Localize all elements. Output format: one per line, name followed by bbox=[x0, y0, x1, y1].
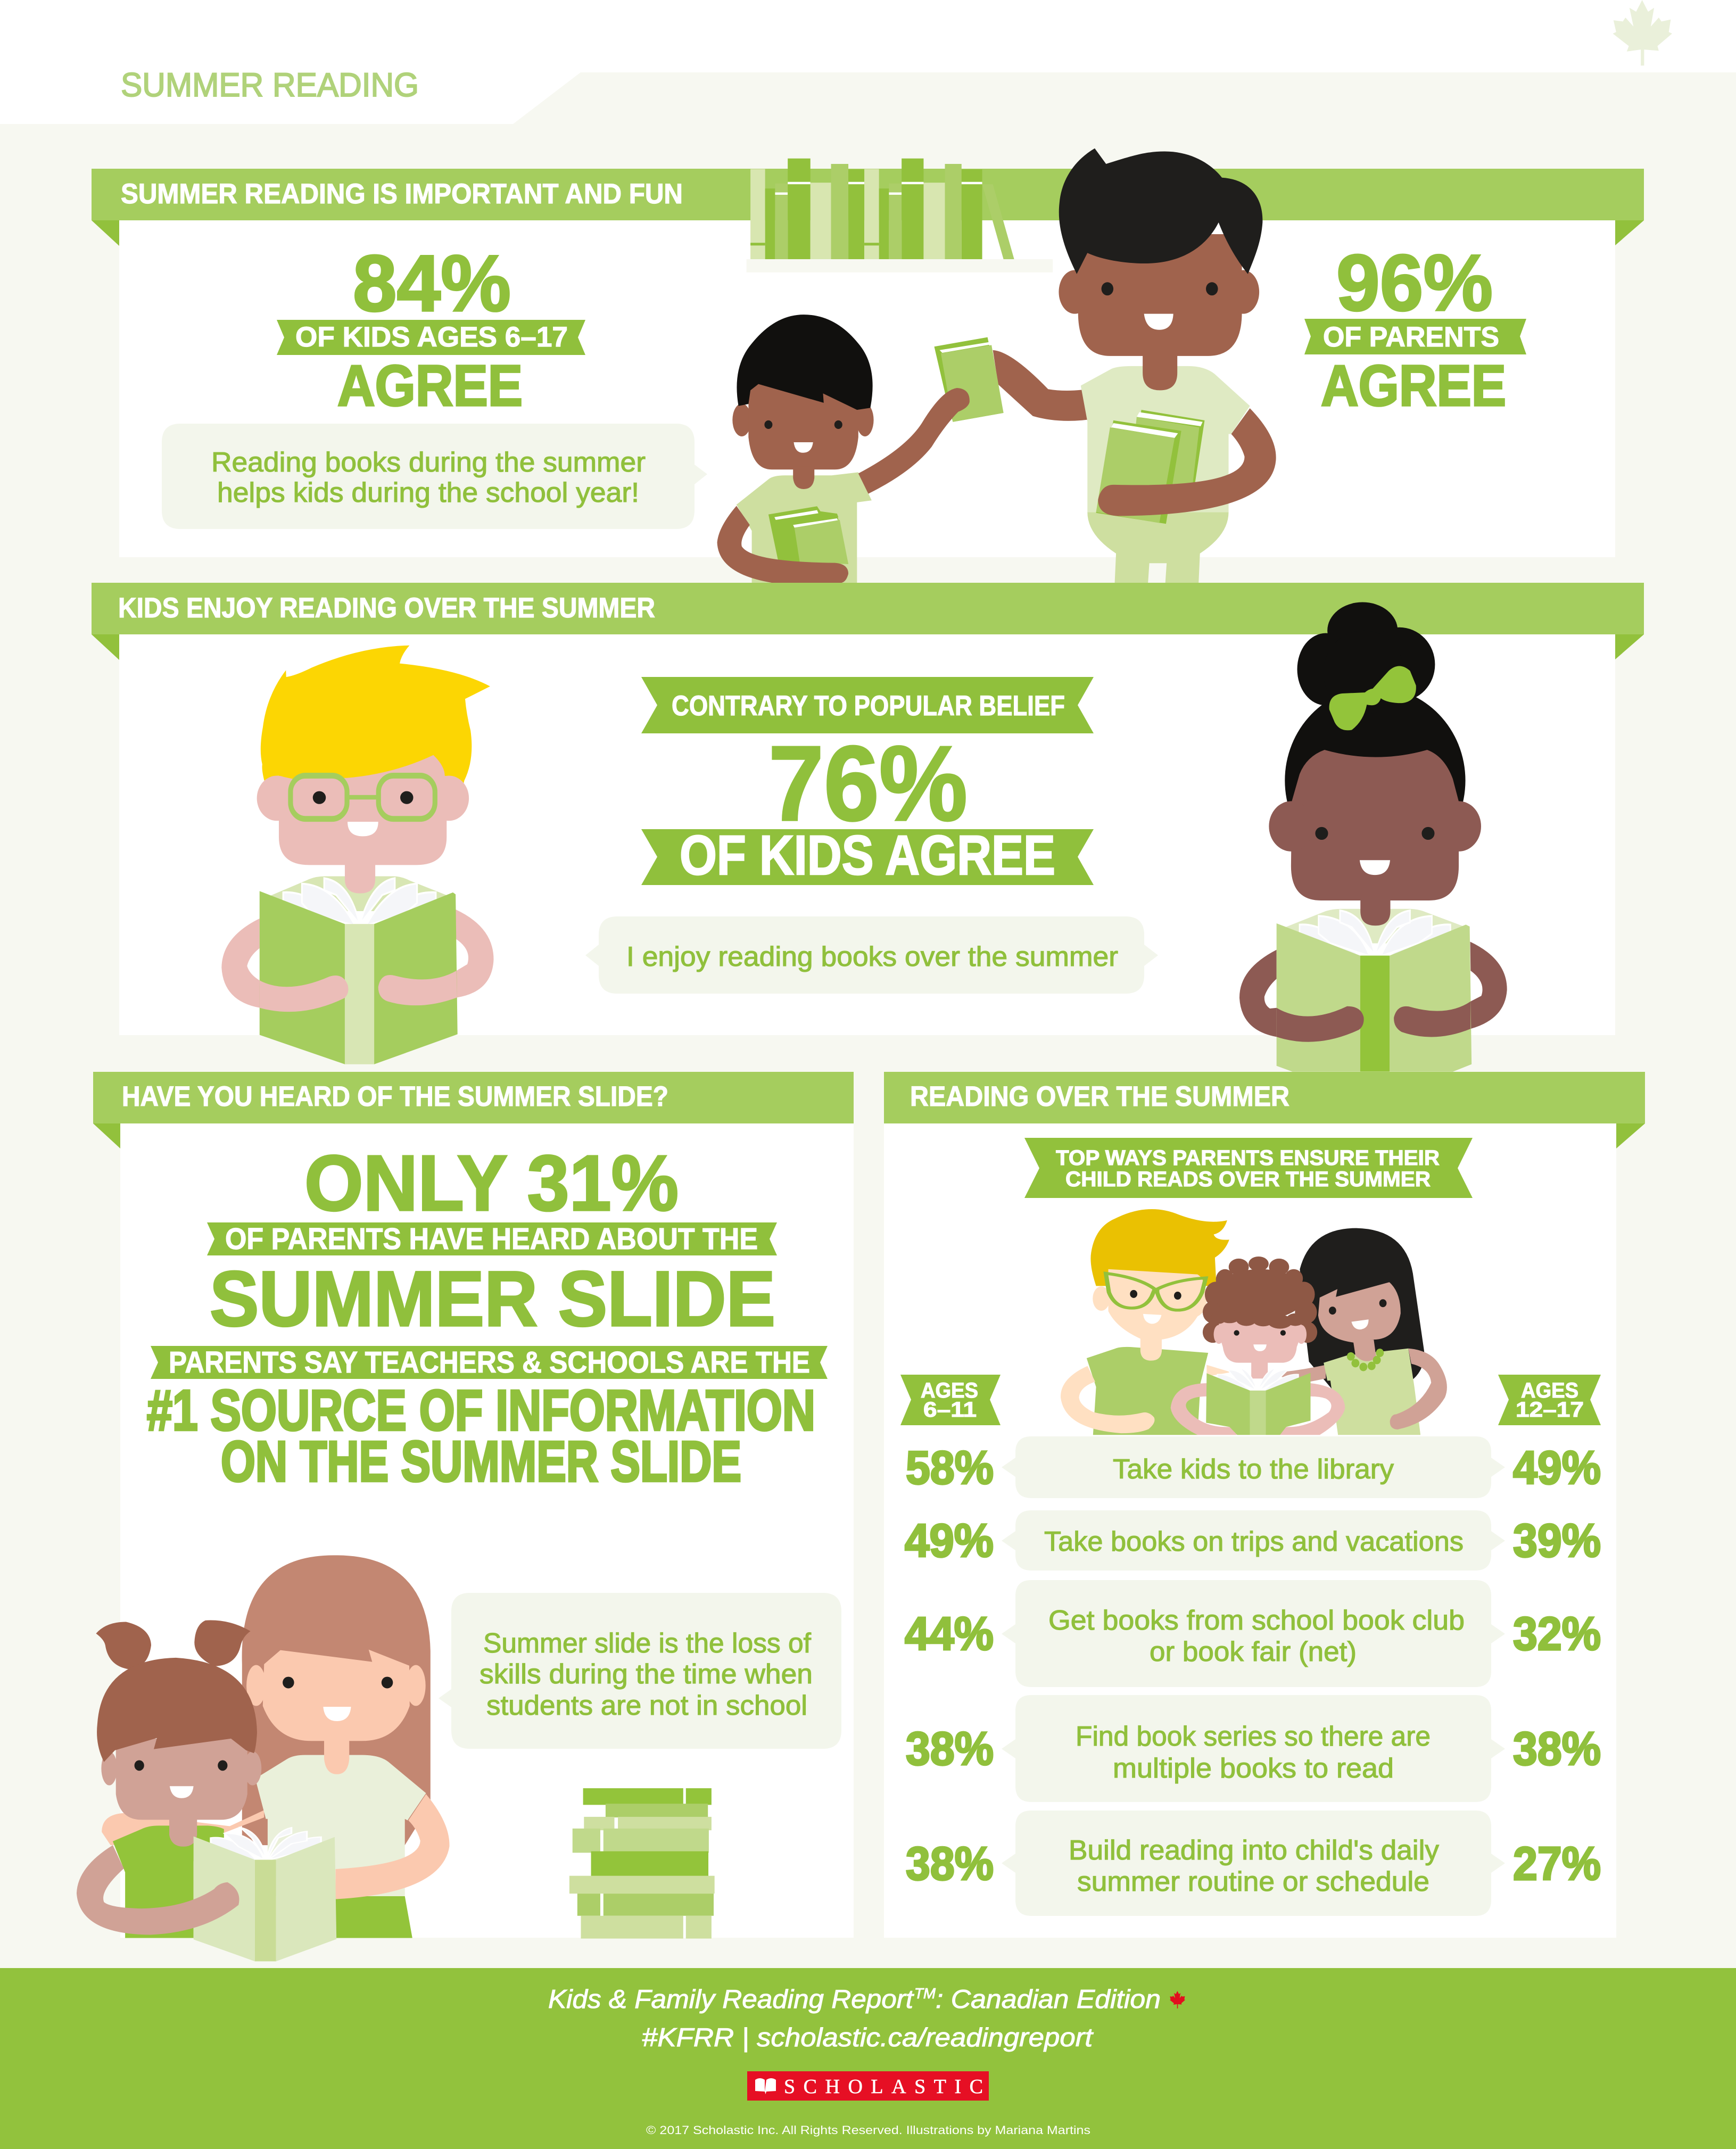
stat: 84 percent of kids: AGREE bbox=[337, 353, 523, 418]
illustration: mother and daughter reading bbox=[77, 1555, 450, 1961]
callout: reading books during the summer bbox=[162, 424, 707, 529]
row: book club bbox=[905, 1580, 1601, 1687]
callout: summer slide definition bbox=[439, 1593, 841, 1749]
footer: TM bbox=[914, 1985, 936, 2002]
stat: 84 percent of kids: 84% bbox=[353, 238, 511, 328]
icon: maple leaf bbox=[1613, 0, 1672, 65]
ribbon: ages 12-17 bbox=[1498, 1375, 1601, 1425]
panel: kids enjoy reading over the summer bbox=[92, 583, 1644, 1035]
stat: only 31 percent bbox=[147, 1139, 828, 1493]
icon: red maple leaf bbox=[1170, 1991, 1185, 2009]
logo: scholastic bbox=[747, 2071, 989, 2101]
ribbon: ages 6-11: AGES bbox=[921, 1379, 978, 1402]
row: daily routine: 38% bbox=[906, 1837, 994, 1890]
row: take books on trips: Take books on trips and vacations bbox=[1044, 1526, 1464, 1557]
stat: 96 percent of parents: 96% bbox=[1336, 238, 1493, 327]
stat: 76 percent of kids agree: OF KIDS AGREE bbox=[680, 824, 1055, 887]
stat: 84 percent of kids bbox=[277, 238, 585, 418]
footer: Kids & Family Reading Report bbox=[548, 1985, 914, 2014]
icon: bookshelf bbox=[747, 159, 1053, 272]
stat: 76 percent of kids agree bbox=[641, 677, 1094, 887]
panel: kids enjoy reading over the summer: KIDS ENJOY READING OVER THE SUMMER bbox=[118, 592, 655, 624]
callout: I enjoy reading books bbox=[585, 916, 1158, 994]
callout: I enjoy reading books: I enjoy reading books over the summer bbox=[626, 941, 1118, 972]
ribbon: top ways parents ensure: TOP WAYS PARENTS ENSURE THEIR bbox=[1056, 1146, 1440, 1170]
copyright: © 2017 Scholastic Inc. All Rights Reserved. Illustrations by Mariana Martins bbox=[646, 2123, 1090, 2137]
ribbon: top ways parents ensure bbox=[1024, 1138, 1473, 1198]
row: book club: 32% bbox=[1513, 1607, 1601, 1660]
stat: 96 percent of parents: OF PARENTS bbox=[1323, 321, 1499, 353]
ribbon: ages 12-17: 12–17 bbox=[1516, 1398, 1584, 1421]
row: daily routine: summer routine or schedule bbox=[1077, 1866, 1429, 1897]
footer: #KFRR | scholastic.ca/readingreport bbox=[642, 2023, 1094, 2052]
stat: only 31 percent: ONLY 31% bbox=[304, 1139, 679, 1227]
callout: summer slide definition: skills during the time when bbox=[480, 1659, 813, 1690]
row: book club: or book fair (net) bbox=[1150, 1636, 1357, 1667]
row: take kids to the library: 58% bbox=[906, 1441, 994, 1494]
row: take books on trips bbox=[905, 1510, 1601, 1571]
logo: scholastic: SCHOLASTIC bbox=[784, 2076, 983, 2098]
row: take kids to the library bbox=[906, 1436, 1601, 1498]
ribbon: ages 6-11 bbox=[900, 1375, 1001, 1425]
stat: only 31 percent: SUMMER SLIDE bbox=[210, 1255, 775, 1343]
footer bbox=[0, 1968, 1736, 2149]
row: book club: Get books from school book club bbox=[1048, 1605, 1465, 1636]
row: daily routine bbox=[906, 1811, 1601, 1916]
stat: 96 percent of parents: AGREE bbox=[1321, 353, 1506, 418]
row: take books on trips: 49% bbox=[905, 1514, 994, 1567]
row: book series bbox=[906, 1695, 1601, 1802]
row: daily routine: 27% bbox=[1513, 1837, 1601, 1890]
illustration: family reading together bbox=[1061, 1209, 1447, 1435]
stat: only 31 percent: PARENTS SAY TEACHERS & SCHOOLS ARE THE bbox=[169, 1345, 810, 1379]
footer: : Canadian Edition bbox=[936, 1985, 1161, 2014]
row: take books on trips: 39% bbox=[1513, 1514, 1601, 1567]
illustration: blond boy reading bbox=[221, 646, 494, 1064]
row: daily routine: Build reading into child's daily bbox=[1069, 1835, 1439, 1866]
illustration: girl with bun reading bbox=[1239, 602, 1507, 1072]
stat: 84 percent of kids: OF KIDS AGES 6–17 bbox=[295, 321, 568, 353]
stat: only 31 percent: ON THE SUMMER SLIDE bbox=[221, 1429, 741, 1493]
illustration: stack of books bbox=[569, 1788, 715, 1939]
illustration: boy reaching for book bbox=[717, 315, 970, 583]
ribbon: top ways parents ensure: CHILD READS OVER THE SUMMER bbox=[1065, 1168, 1431, 1191]
stat: only 31 percent: #1 SOURCE OF INFORMATION bbox=[147, 1378, 815, 1442]
row: take kids to the library: 49% bbox=[1513, 1441, 1601, 1494]
callout: summer slide definition: Summer slide is the loss of bbox=[483, 1628, 812, 1659]
illustration: father with books bbox=[934, 148, 1276, 583]
panel: summer reading is important and fun bbox=[92, 169, 1644, 557]
stat: only 31 percent: OF PARENTS HAVE HEARD ABOUT THE bbox=[225, 1222, 758, 1256]
ribbon: ages 6-11: 6–11 bbox=[923, 1398, 977, 1421]
panel: have you heard of the summer slide: HAVE YOU HEARD OF THE SUMMER SLIDE? bbox=[122, 1081, 668, 1112]
ribbon: ages 12-17: AGES bbox=[1521, 1379, 1578, 1402]
title: SUMMER READING bbox=[121, 67, 419, 104]
panel: reading over the summer: READING OVER THE SUMMER bbox=[910, 1081, 1289, 1112]
callout: reading books during the summer: helps kids during the school year! bbox=[217, 477, 639, 508]
row: book series: 38% bbox=[1513, 1722, 1601, 1775]
row: book series: multiple books to read bbox=[1113, 1753, 1394, 1784]
callout: reading books during the summer: Reading books during the summer bbox=[211, 447, 646, 478]
stat: 76 percent of kids agree: CONTRARY TO POPULAR BELIEF bbox=[672, 690, 1065, 722]
row: book series: 38% bbox=[906, 1722, 994, 1775]
panel: reading over the summer bbox=[884, 1072, 1645, 1938]
row: book series: Find book series so there are bbox=[1076, 1721, 1431, 1752]
panel: summer reading is important and fun: SUMMER READING IS IMPORTANT AND FUN bbox=[121, 178, 683, 210]
callout: summer slide definition: students are not in school bbox=[486, 1690, 807, 1721]
stat: 96 percent of parents bbox=[1304, 238, 1526, 418]
stat: 76 percent of kids agree: 76% bbox=[768, 724, 968, 843]
panel: have you heard of the summer slide bbox=[93, 1072, 854, 1938]
row: book club: 44% bbox=[905, 1607, 994, 1660]
row: take kids to the library: Take kids to the library bbox=[1113, 1454, 1394, 1485]
